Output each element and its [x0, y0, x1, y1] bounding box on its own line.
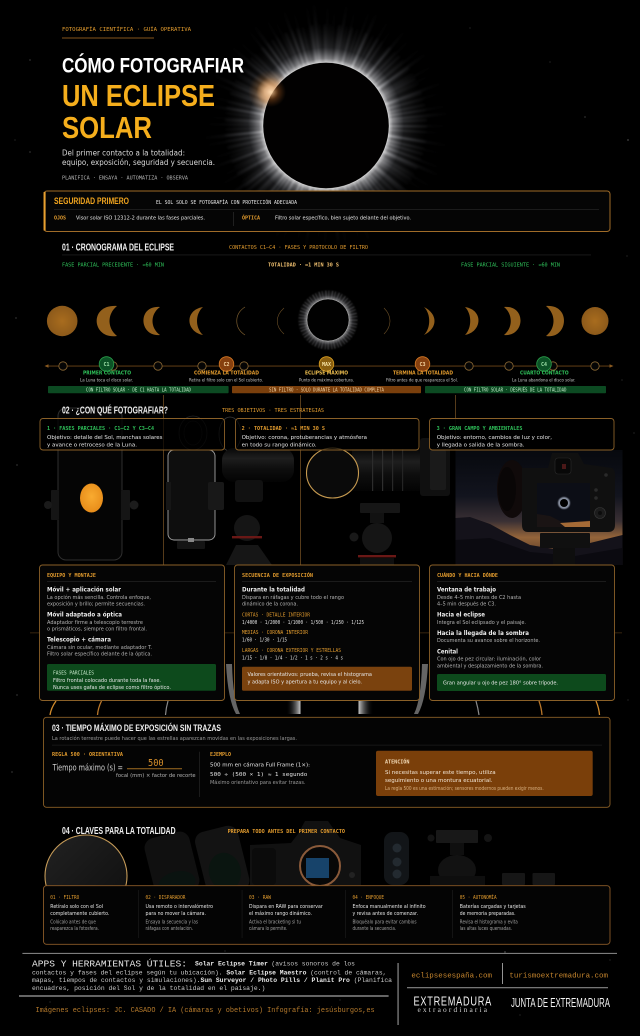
- panel: equipo y montaje: Cámara sin ocular, mediante adaptador T.: [47, 644, 152, 651]
- contact labels: La Luna abandona el disco solar.: [512, 378, 576, 384]
- panel: secuencia de exposición: LARGAS · CORONA EXTERIOR Y ESTRELLAS: [242, 648, 341, 654]
- panel: equipo y montaje: Telescopio + cámara: [47, 635, 111, 643]
- objective card 2: 2 · TOTALIDAD · ≈1 MIN 30 S: [242, 426, 325, 432]
- heading: 01 cronograma: 01 · CRONOGRAMA DEL ECLIPSE: [62, 242, 174, 253]
- panel: secuencia de exposición: Dispara en ráfagas y cubre todo el rango: [242, 594, 345, 601]
- panel: 03 tiempo máximo: [44, 717, 610, 807]
- callout: fases parciales: Nunca uses gafas de eclipse como filtro óptico.: [53, 684, 171, 691]
- objective card 2: [236, 418, 419, 450]
- objective card 3: 3 · GRAN CAMPO Y AMBIENTALES: [437, 426, 522, 432]
- panel: secuencia de exposición: 1/60 · 1/30 · 1/15: [242, 637, 287, 643]
- panel: equipo y montaje: EQUIPO Y MONTAJE: [47, 573, 96, 579]
- panel: seguridad primero: SEGURIDAD PRIMERO: [54, 196, 129, 206]
- objective card 3: y llegada o salida de la sombra.: [437, 442, 525, 448]
- photo: remote trigger: [384, 832, 409, 885]
- panel: cuándo y hacia dónde: Cenital: [437, 647, 458, 655]
- heading: 04 claves: PREPARA TODO ANTES DEL PRIMER CONTACTO: [228, 829, 345, 835]
- key 03 raw: Activa el bracketing si tu: [249, 920, 301, 926]
- key 02 disparador: [146, 895, 213, 932]
- subtitle: [62, 148, 215, 167]
- key 05 autonomía: las altas luces quemadas.: [460, 926, 512, 932]
- contact labels: CUARTO CONTACTO: [520, 371, 569, 377]
- contact badge C1: [99, 357, 114, 371]
- callout: atención: seguimiento o una montura ecuatorial.: [385, 778, 493, 784]
- objective card 2: en todo su rango dinámico.: [242, 442, 317, 448]
- panel: equipo y montaje: Móvil adaptado a óptica: [47, 610, 122, 618]
- key 01 filtro: 01 · FILTRO: [50, 895, 79, 901]
- contact badge C2: C2: [223, 362, 230, 368]
- footer: websites: [407, 963, 609, 988]
- photo: binoculars: [142, 824, 252, 901]
- key 03 raw: [249, 895, 323, 932]
- panel: cuándo y hacia dónde: 4–5 min después de C3.: [437, 600, 496, 608]
- panel: seguridad primero: Visor solar ISO 12312-2 durante las fases parciales.: [76, 216, 205, 222]
- panel: secuencia de exposición: MEDIAS · CORONA INTERIOR: [242, 630, 309, 636]
- example block: EJEMPLO: [210, 752, 231, 758]
- phase duration labels: TOTALIDAD · ≈1 MIN 30 S: [268, 262, 339, 268]
- phase duration labels: FASE PARCIAL PRECEDENTE · ≈60 MIN: [62, 262, 164, 268]
- key 02 disparador: Usa remoto o intervalómetro: [146, 903, 213, 910]
- callout: gran angular: Gran angular u ojo de pez 180° sobre trípode.: [443, 680, 558, 686]
- photo: telephoto camera with filter: [306, 438, 450, 565]
- decorative eclipse arcs between cards: [50, 664, 600, 715]
- eyebrow: [62, 25, 191, 38]
- contact labels: La Luna toca el disco solar.: [80, 378, 133, 384]
- objective card 3: [430, 418, 614, 450]
- key 04 enfoque: y revisa antes de comenzar.: [352, 911, 418, 917]
- photo: batteries: [502, 873, 555, 885]
- panel: secuencia de exposición: 1/4000 · 1/2000 · 1/1000 · 1/500 · 1/250 · 1/125: [242, 620, 364, 626]
- contact badge max: MAX: [322, 362, 331, 368]
- panel: cuándo y hacia dónde: Integra el Sol eclipsado y el paisaje.: [437, 620, 526, 626]
- phase duration labels: FASE PARCIAL SIGUIENTE · ≈60 MIN: [461, 262, 560, 268]
- contact labels: COMIENZA LA TOTALIDAD: [194, 371, 260, 377]
- panel: secuencia de exposición: SECUENCIA DE EXPOSICIÓN: [242, 572, 313, 579]
- contact labels: PRIMER CONTACTO: [83, 371, 132, 377]
- filter protocol bars: CON FILTRO SOLAR · DE C1 HASTA LA TOTALIDAD: [86, 387, 191, 393]
- heading: 04 claves: [62, 826, 345, 837]
- logo: extremadura extraordinaria: EXTREMADURA: [414, 994, 492, 1008]
- callout: fases parciales: Filtro frontal colocado durante toda la fase.: [53, 678, 161, 684]
- contact badge max: [319, 357, 334, 371]
- panel: equipo y montaje: Filtro solar específico delante de la óptica.: [47, 650, 152, 658]
- key 02 disparador: Ensaya la secuencia y las: [146, 920, 198, 926]
- formula: regla 500: focal (mm) × factor de recorte: [116, 773, 196, 779]
- logo: extremadura extraordinaria: [414, 994, 492, 1014]
- panel: equipo y montaje: Móvil + aplicación solar: [47, 586, 122, 594]
- panel: 03 tiempo máximo: 03 · TIEMPO MÁXIMO DE EXPOSICIÓN SIN TRAZAS: [52, 722, 221, 734]
- callout: valores orientativos: [242, 667, 412, 691]
- objective card 1: Objetivo: detalle del Sol, manchas solares: [47, 435, 163, 441]
- key 01 filtro: completamente cubierto.: [50, 911, 110, 917]
- key 02 disparador: 02 · DISPARADOR: [146, 895, 186, 901]
- key 04 enfoque: Enfoca manualmente al infinito: [352, 904, 426, 910]
- heading: 02 con qué fotografiar: [62, 404, 324, 417]
- panel: secuencia de exposición: [234, 565, 420, 700]
- panel: secuencia de exposición: 1/15 · 1/8 · 1/4 · 1/2 · 1 s · 2 s · 4 s: [242, 655, 343, 661]
- callout: atención: ATENCIÓN: [385, 758, 409, 765]
- eclipse phase sequence: [47, 289, 608, 351]
- contact badge C4: C4: [541, 362, 547, 368]
- panel: cuándo y hacia dónde: Con ojo de pez circular: iluminación, color: [437, 656, 542, 662]
- contact timeline: [44, 357, 614, 371]
- contact badge C3: [415, 357, 430, 371]
- formula: regla 500: [52, 752, 196, 779]
- callout: gran angular: [437, 674, 606, 691]
- photo: vertical dividers: [30, 395, 622, 633]
- phase duration labels: [62, 262, 560, 268]
- key 01 filtro: Retíralo solo con el Sol: [50, 903, 103, 910]
- contact labels: Filtro antes de que reaparezca el Sol.: [386, 378, 458, 384]
- callout: valores orientativos: y adapta ISO y apertura a tu equipo y al cielo.: [248, 680, 362, 686]
- contact labels: ECLIPSE MÁXIMO: [305, 370, 349, 377]
- panel: equipo y montaje: La opción más sencilla. Controla enfoque,: [47, 594, 151, 601]
- objective card 1: 1 · FASES PARCIALES · C1–C2 Y C3–C4: [47, 426, 154, 432]
- footer: apps y herramientas: [19, 953, 617, 997]
- hero eclipse: [226, 26, 426, 226]
- callout: atención: La regla 500 es una estimación; sensores modernos pueden exigir menos.: [385, 785, 544, 792]
- example block: 500 mm en cámara Full Frame (1×):: [210, 762, 310, 768]
- heading: 01 cronograma: CONTACTOS C1–C4 · FASES Y PROTOCOLO DE FILTRO: [229, 245, 368, 251]
- contact badge C2: [219, 357, 234, 371]
- panel: equipo y montaje: Adaptador firme a telescopio terrestre: [47, 620, 143, 626]
- key 03 raw: Dispara en RAW para conservar: [249, 904, 323, 910]
- key 03 raw: 03 · RAW: [249, 895, 272, 901]
- footer: credits: Imágenes eclipses: JC. CASADO / IA (cámaras y obetivos) Infografía: jesúsburgos,es: [36, 1007, 375, 1015]
- heading: 02 con qué fotografiar: TRES OBJETIVOS · TRES ESTRATEGIAS: [222, 408, 324, 414]
- panel: claves: [44, 886, 610, 944]
- formula: regla 500: Tiempo máximo (s) =: [52, 763, 123, 773]
- key 01 filtro: reaparezca la fotosfera.: [50, 926, 99, 932]
- key 04 enfoque: Bloquéalo para evitar cambios: [352, 919, 417, 926]
- key 04 enfoque: [352, 895, 426, 932]
- panel: 03 tiempo máximo: La rotación terrestre puede hacer que las estrellas aparezcan movidas en las exposiciones largas.: [52, 735, 297, 742]
- key 02 disparador: ráfagas con antelación.: [146, 925, 193, 932]
- key 05 autonomía: de memoria preparadas.: [460, 911, 516, 917]
- tagline: PLANIFICA · ENSAYA · AUTOMATIZA · OBSERVA: [62, 176, 188, 182]
- callout: fases parciales: FASES PARCIALES: [53, 670, 94, 676]
- formula: regla 500: REGLA 500 · ORIENTATIVA: [52, 752, 123, 758]
- panel: seguridad primero: OJOS: [54, 215, 66, 221]
- contact badge C1: C1: [103, 362, 110, 368]
- objective card 3: Objetivo: entorno, cambios de luz y color,: [437, 435, 552, 441]
- key 05 autonomía: Revisa el histograma y evita: [460, 920, 518, 926]
- filter protocol bars: CON FILTRO SOLAR · DESPUÉS DE LA TOTALIDAD: [464, 385, 566, 393]
- key 03 raw: cámara lo permite.: [249, 925, 288, 932]
- filter protocol bars: [48, 385, 606, 393]
- panel: seguridad primero: EL SOL SOLO SE FOTOGRAFÍA CON PROTECCIÓN ADECUADA: [156, 198, 297, 206]
- footer: apps y herramientas: contactos y fases del eclipse según tu ubicación). Solar Eclipse Maestro (control de cámaras,: [32, 969, 386, 976]
- panel: cuándo y hacia dónde: ambiental y desplazamiento de la sombra.: [437, 664, 543, 670]
- panel: seguridad primero: Filtro solar específico, bien sujeto delante del objetivo.: [275, 214, 411, 222]
- footer: apps y herramientas: Solar Eclipse Timer: [195, 960, 268, 967]
- contact labels: Retira el filtro solo con el Sol cubierto.: [189, 378, 263, 384]
- heading: 04 claves: 04 · CLAVES PARA LA TOTALIDAD: [62, 826, 176, 837]
- panel: equipo y montaje: o prismáticos, siempre con filtro frontal.: [47, 626, 147, 632]
- photo: phone with solar app: [44, 408, 138, 560]
- example block: Máximo orientativo para evitar trazas.: [210, 779, 306, 786]
- key 05 autonomía: [460, 893, 526, 932]
- panel: equipo y montaje: [40, 565, 224, 700]
- heading: 01 cronograma: [62, 242, 591, 255]
- subtitle: equipo, exposición, seguridad y secuencia.: [62, 158, 215, 167]
- key 05 autonomía: Baterías cargadas y tarjetas: [460, 903, 526, 910]
- example block: [210, 752, 310, 786]
- callout: atención: Si necesitas superar este tiempo, utiliza: [385, 770, 496, 776]
- title: [62, 52, 244, 145]
- photo: tripod head: [428, 830, 492, 885]
- panel: seguridad primero: [44, 191, 610, 232]
- footer: websites: turismoextremadura.com: [509, 972, 609, 980]
- panel: secuencia de exposición: CORTAS · DETALLE INTERIOR: [242, 612, 311, 618]
- photo: phone on adapter with telescope: [166, 416, 294, 565]
- callout: valores orientativos: Valores orientativos: prueba, revisa el histograma: [248, 672, 372, 678]
- panel: cuándo y hacia dónde: [430, 565, 614, 700]
- objective card 1: y avance o retroceso de la Luna.: [47, 442, 137, 448]
- objective card 2: Objetivo: corona, protuberancias y atmósfera: [242, 434, 367, 441]
- panel: secuencia de exposición: Durante la totalidad: [242, 586, 305, 594]
- logo: extremadura extraordinaria: extraordinaria: [418, 1005, 488, 1014]
- panel: cuándo y hacia dónde: CUÁNDO Y HACIA DÓNDE: [437, 572, 498, 579]
- key 02 disparador: para no mover la cámara.: [146, 910, 206, 917]
- contact labels: Punto de máxima cobertura.: [299, 377, 354, 384]
- footer: apps y herramientas: encuadres, posición del Sol y de la totalidad en el paisaje.): [32, 985, 265, 992]
- panel: cuándo y hacia dónde: Desde 4–5 min antes de C2 hasta: [437, 595, 521, 601]
- panel: cuándo y hacia dónde: Ventana de trabajo: [437, 586, 496, 594]
- panel: cuándo y hacia dónde: Hacia la llegada de la sombra: [437, 629, 529, 637]
- eyebrow: FOTOGRAFÍA CIENTÍFICA · GUÍA OPERATIVA: [62, 25, 191, 33]
- formula: regla 500: 500: [148, 758, 164, 769]
- panel: cuándo y hacia dónde: Documenta su avance sobre el horizonte.: [437, 638, 540, 644]
- contact labels: TERMINA LA TOTALIDAD: [393, 371, 454, 377]
- key 01 filtro: [50, 895, 110, 932]
- title: UN ECLIPSE: [62, 79, 215, 113]
- key 03 raw: el máximo rango dinámico.: [249, 910, 312, 917]
- example block: 500 ÷ (500 × 1) ≈ 1 segundo: [210, 772, 307, 778]
- photo: camera with landscape: [456, 450, 622, 565]
- panel: cuándo y hacia dónde: Hacia el eclipse: [437, 610, 485, 618]
- contact labels: [80, 370, 576, 384]
- subtitle: Del primer contacto a la totalidad:: [62, 148, 185, 158]
- heading: 02 con qué fotografiar: 02 · ¿CON QUÉ FOTOGRAFIAR?: [62, 404, 168, 417]
- title: SOLAR: [62, 111, 152, 145]
- footer: websites: eclipsesespaña.com: [411, 972, 493, 980]
- panel: equipo y montaje: exposición y brillo; permite secuencias.: [47, 600, 145, 608]
- filter protocol bars: SIN FILTRO · SOLO DURANTE LA TOTALIDAD COMPLETA: [269, 387, 384, 393]
- key 04 enfoque: durante la secuencia.: [352, 926, 396, 932]
- key 04 enfoque: 04 · ENFOQUE: [352, 895, 384, 901]
- contact badge C3: C3: [419, 362, 426, 368]
- key 05 autonomía: 05 · AUTONOMÍA: [460, 893, 497, 901]
- footer: apps y herramientas: (avisos sonoros de los: [271, 960, 355, 967]
- objective card 1: [40, 418, 224, 450]
- callout: fases parciales: [47, 664, 216, 691]
- footer: apps y herramientas: mapas, tiempos de contactos y simulaciones).Sun Surveyor / Photo Pills / Planit Pro (Planifica: [32, 977, 392, 984]
- panel: secuencia de exposición: dinámico de la corona.: [242, 600, 298, 608]
- photo: camera body: [250, 821, 361, 886]
- title: CÓMO FOTOGRAFIAR: [62, 52, 244, 78]
- contact badge C4: [537, 357, 551, 371]
- photo: solar filter disc: [45, 835, 127, 917]
- panel: seguridad primero: ÓPTICA: [242, 214, 260, 221]
- callout: atención: [376, 751, 593, 796]
- footer: apps y herramientas: APPS Y HERRAMIENTAS ÚTILES:: [32, 959, 187, 970]
- key 01 filtro: Colócalo antes de que: [50, 919, 96, 926]
